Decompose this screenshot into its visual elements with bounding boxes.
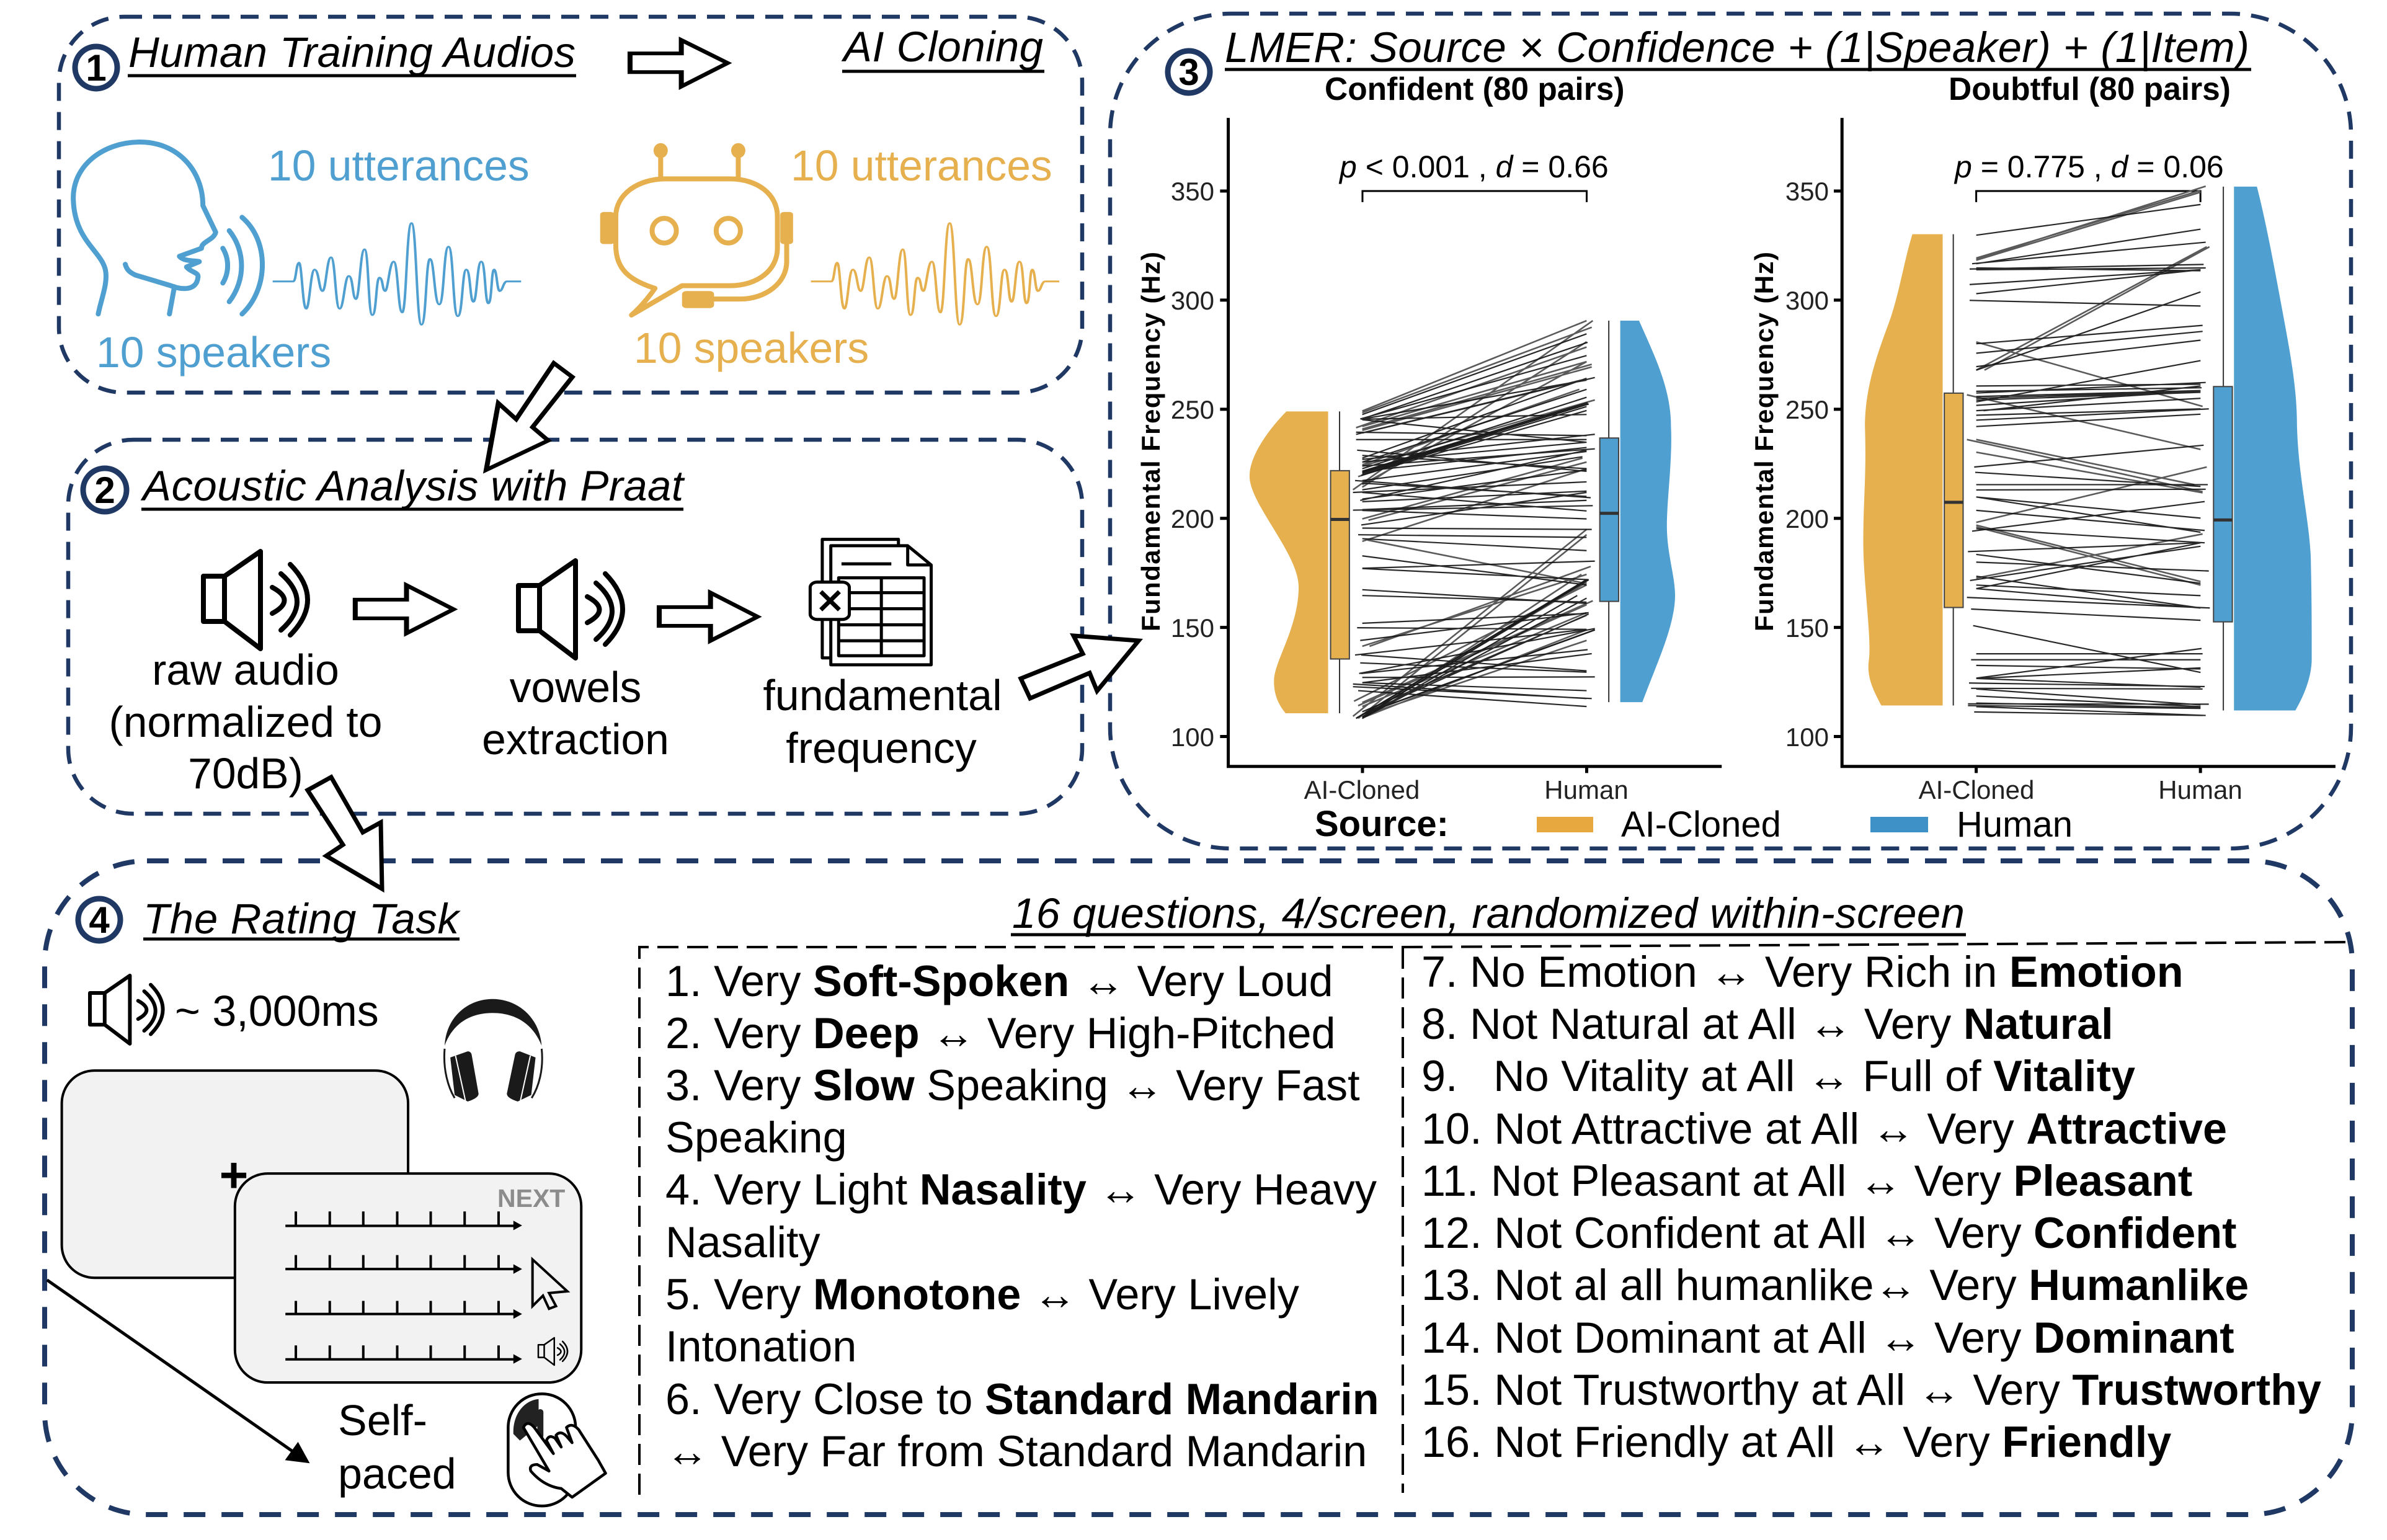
question list: items 7 to 16: 10. Not Attractive at All ↔ Very Attractive <box>1421 1104 2227 1153</box>
statistic label: p < 0.001 , d = 0.66 <box>1338 149 1609 184</box>
icon: hand on mouse <box>508 1394 606 1506</box>
axes <box>1220 118 1722 773</box>
chart title: doubtful: Doubtful (80 pairs) <box>1949 71 2231 107</box>
x axis labels: AI-Cloned <box>1919 775 2034 804</box>
icon: AI robot with headset <box>600 143 793 315</box>
number badge 1: 1 <box>86 47 107 89</box>
heading: human training audios: Human Training Audios <box>128 29 576 76</box>
question list: items 7 to 16: 16. Not Friendly at All ↔ Very Friendly <box>1421 1417 2171 1466</box>
question list: items 7 to 16: 15. Not Trustworthy at All ↔ Very Trustworthy <box>1421 1365 2321 1414</box>
screen: fixation <box>62 1070 408 1278</box>
blue violin and box <box>2234 187 2312 711</box>
y axis labels: 100 <box>1171 723 1214 752</box>
x axis labels: AI-Cloned <box>1304 775 1420 804</box>
heading: question summary: 16 questions, 4/screen, randomized within-screen <box>1012 889 1965 937</box>
label: next: NEXT <box>497 1184 565 1213</box>
y axis labels: 250 <box>1785 395 1829 424</box>
y axis labels: 150 <box>1171 613 1214 643</box>
y axis title: Fundamental Frequency (Hz) <box>1749 252 1779 631</box>
question list: items 1 to 6: 2. Very Deep ↔ Very High-Pitched <box>665 1008 1336 1057</box>
blue violin and box <box>1620 321 1675 702</box>
number badge 3: 3 <box>1178 51 1199 93</box>
chart title: confident: Confident (80 pairs) <box>1325 71 1625 107</box>
legend: source: Source: <box>1315 804 1449 844</box>
x axis labels: Human <box>1544 775 1629 804</box>
number badge 4 <box>78 899 120 941</box>
label: paced: paced <box>338 1449 456 1498</box>
waveform: AI <box>811 223 1059 324</box>
question list: items 7 to 16: 12. Not Confident at All ↔ Very Confident <box>1421 1208 2237 1257</box>
orange violin and box <box>1834 118 2336 773</box>
number badge 4: 4 <box>89 899 110 941</box>
significance bracket <box>1362 191 1587 202</box>
chart: confident raincloud <box>1136 118 1722 804</box>
y axis labels: 300 <box>1785 286 1829 315</box>
panel 1: training audios and AI cloning <box>59 17 1082 393</box>
arrow: panel 1 to panel 2 <box>486 363 572 470</box>
icon: mini speaker <box>538 1338 567 1365</box>
icon: speaking human head <box>73 142 262 314</box>
question list: items 1 to 6: Nasality <box>665 1217 820 1266</box>
question list: items 1 to 6: Intonation <box>665 1322 856 1371</box>
question list: items 7 to 16 <box>1421 947 2321 1466</box>
screen: rating scales <box>235 1173 581 1382</box>
y axis labels: 350 <box>1171 177 1214 206</box>
panel 4: the rating task <box>45 861 2352 1515</box>
panel 2 outline <box>68 440 1082 814</box>
question list: items 1 to 6 <box>665 956 1379 1475</box>
panel 2: acoustic analysis <box>68 440 1082 814</box>
question list: items 7 to 16: 7. No Emotion ↔ Very Rich in Emotion <box>1421 947 2184 996</box>
label: normalized to: (normalized to <box>109 698 382 746</box>
number badge 2 <box>83 468 127 512</box>
arrow: vowels to spreadsheet <box>659 593 757 641</box>
number badge 3 <box>1168 51 1210 93</box>
icon: spreadsheet <box>810 540 931 665</box>
icon: speaker raw audio <box>203 551 308 649</box>
label: human speakers: 10 speakers <box>96 328 331 376</box>
label: human utterances: 10 utterances <box>268 141 530 190</box>
question list: items 7 to 16: 14. Not Dominant at All ↔ Very Dominant <box>1421 1313 2234 1362</box>
fixation cross: + <box>220 1147 248 1203</box>
question list: items 1 to 6: 1. Very Soft-Spoken ↔ Very Loud <box>665 956 1333 1005</box>
legend: source: AI-Cloned <box>1621 804 1781 845</box>
y axis labels <box>1171 177 1214 752</box>
y axis labels: 300 <box>1171 286 1214 315</box>
label: frequency: frequency <box>786 724 977 772</box>
heading: LMER formula: LMER: Source × Confidence + (1|Speaker) + (1|Item) <box>1225 24 2249 71</box>
icon: stimulus speaker <box>90 976 163 1044</box>
label: raw audio: raw audio <box>152 646 339 694</box>
panel 4 outline <box>45 861 2352 1515</box>
panel 3 outline <box>1110 14 2351 848</box>
question list: items 7 to 16: 8. Not Natural at All ↔ Very Natural <box>1421 999 2114 1048</box>
x axis labels <box>1304 775 1629 804</box>
y axis labels: 350 <box>1785 177 1829 206</box>
x axis labels <box>1919 775 2243 804</box>
number badge 1 <box>75 47 117 89</box>
orange violin and box <box>1220 118 1722 773</box>
label: 70dB: 70dB) <box>188 749 303 798</box>
label: AI speakers: 10 speakers <box>634 324 869 372</box>
icon: speaker vowels <box>518 561 623 658</box>
icon: headphones <box>444 999 542 1102</box>
legend: source <box>1315 804 2073 845</box>
label: fundamental: fundamental <box>763 671 1002 719</box>
arrow: panel 2 to panel 4 <box>308 777 382 889</box>
y axis labels <box>1785 177 1829 752</box>
arrow: self-paced progression <box>47 1280 309 1463</box>
question list: items 7 to 16: Vitality <box>1993 1051 2135 1100</box>
paired lines <box>1353 321 1595 718</box>
question list: items 7 to 16: 13. Not al all humanlike↔ Very Humanlike <box>1421 1260 2249 1309</box>
question list: items 1 to 6: 3. Very Slow Speaking ↔ Very Fast <box>665 1061 1360 1110</box>
heading: acoustic analysis: Acoustic Analysis with Praat <box>140 462 685 510</box>
significance bracket <box>1976 191 2200 202</box>
question list: items 7 to 16: 11. Not Pleasant at All ↔ Very Pleasant <box>1421 1156 2192 1205</box>
question list: items 1 to 6: 4. Very Light Nasality ↔ Very Heavy <box>665 1165 1377 1214</box>
y axis title: Fundamental Frequency (Hz) <box>1136 252 1165 631</box>
y axis labels: 100 <box>1785 723 1829 752</box>
question list: items 1 to 6: ↔ Very Far from Standard Mandarin <box>665 1427 1367 1475</box>
y axis labels: 150 <box>1785 613 1829 643</box>
question list: items 1 to 6: Speaking <box>665 1113 847 1162</box>
number badge 2: 2 <box>94 470 115 511</box>
chart: doubtful raincloud <box>1749 118 2336 804</box>
x axis labels: Human <box>2158 775 2243 804</box>
arrow: raw audio to vowels <box>355 585 453 633</box>
label: vowels: vowels <box>510 663 641 711</box>
question list: items 7 to 16: 9. <box>1421 1051 1458 1100</box>
label: self: Self- <box>338 1396 427 1444</box>
four rating scales <box>285 1211 522 1364</box>
question list: items 1 to 6: 5. Very Monotone ↔ Very Lively <box>665 1270 1299 1319</box>
cursor <box>533 1260 567 1309</box>
y axis labels: 200 <box>1171 504 1214 533</box>
label: audio duration: ~ 3,000ms <box>175 987 379 1035</box>
question box dividers <box>639 942 2350 1495</box>
label: AI utterances: 10 utterances <box>791 141 1052 190</box>
label: extraction: extraction <box>482 715 669 763</box>
heading: rating task: The Rating Task <box>143 895 461 943</box>
waveform: human <box>273 223 521 324</box>
y axis labels: 250 <box>1171 395 1214 424</box>
arrow: human to AI cloning <box>630 40 727 86</box>
panel 3: LMER charts <box>1110 14 2351 848</box>
statistic label: p = 0.775 , d = 0.06 <box>1954 149 2224 184</box>
heading: AI cloning: AI Cloning <box>841 23 1043 71</box>
axes <box>1834 118 2336 773</box>
paired lines <box>1967 186 2210 716</box>
y axis labels: 200 <box>1785 504 1829 533</box>
question list: items 1 to 6: 6. Very Close to Standard Mandarin <box>665 1374 1379 1423</box>
question list: items 7 to 16: No Vitality at All ↔ Full of <box>1493 1051 1993 1100</box>
arrow: panel 2 to panel 3 <box>1021 636 1139 698</box>
legend: source: Human <box>1957 804 2073 845</box>
panel 1 outline <box>59 17 1082 393</box>
